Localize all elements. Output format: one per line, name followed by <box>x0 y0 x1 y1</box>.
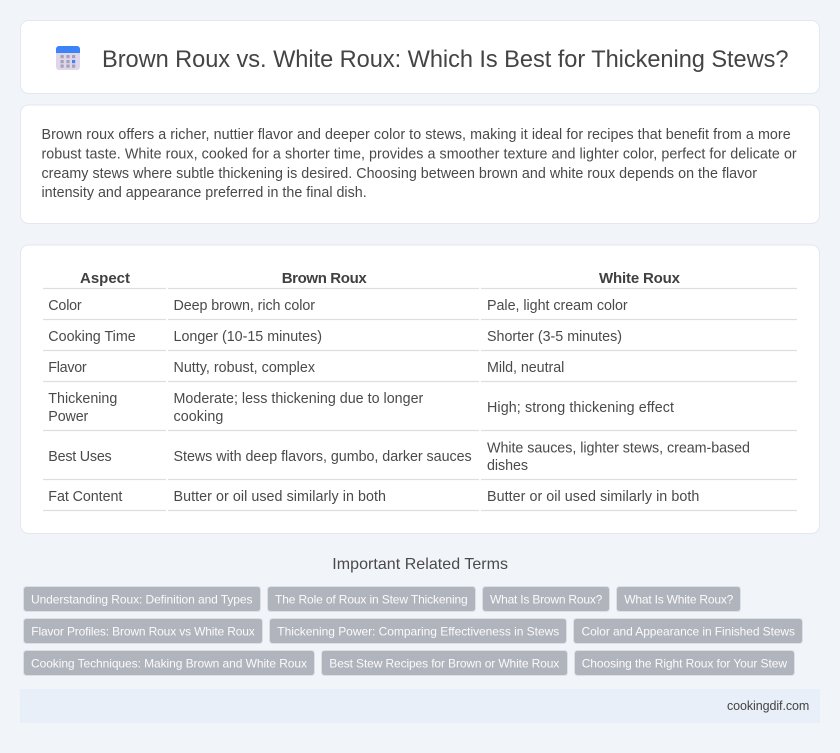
related term tags <box>24 586 802 676</box>
table row: cooking time: Shorter (3-5 minutes) <box>487 329 622 345</box>
text block: summary <box>42 127 797 201</box>
table row: best uses: Best Uses <box>48 449 112 465</box>
table row: color: Deep brown, rich color <box>174 298 315 314</box>
footer source: cookingdif.com <box>727 699 809 713</box>
text block: summary: intensity and appearance preferred in the final dish. <box>42 185 367 201</box>
tag row 1: What Is Brown Roux? <box>490 592 603 606</box>
table row: thickening power <box>43 391 797 430</box>
tag row 3: Cooking Techniques: Making Brown and White Roux <box>31 656 307 670</box>
tag row 3: Best Stew Recipes for Brown or White Roux <box>329 656 559 670</box>
footer bar <box>20 689 820 723</box>
table row: best uses <box>43 440 797 480</box>
table row: fat content: Butter or oil used similarly in both <box>174 489 386 505</box>
table row: fat content: Fat Content <box>48 489 122 505</box>
text block: summary: creamy stews where subtle thickening is desired. Choosing between brown and white roux depends on the flavor <box>42 166 757 182</box>
tag row 2: Thickening Power: Comparing Effectiveness in Stews <box>277 624 559 638</box>
table row: flavor: Nutty, robust, complex <box>174 360 315 376</box>
table row: fat content: Butter or oil used similarly in both <box>487 489 699 505</box>
icon: calendar <box>56 46 80 70</box>
tag row 2: Flavor Profiles: Brown Roux vs White Roux <box>31 624 255 638</box>
panel: comparison table <box>20 245 820 534</box>
tag row 1: Understanding Roux: Definition and Types <box>31 592 252 606</box>
tag row 1: The Role of Roux in Stew Thickening <box>275 592 468 606</box>
panel: summary paragraph <box>20 105 820 224</box>
table row: color: Color <box>48 298 82 314</box>
table row: flavor: Mild, neutral <box>487 360 564 376</box>
table header row <box>43 270 797 288</box>
text block: summary: robust taste. White roux, cooked for a shorter time, provides a smoother texture and lighter color, perfect for delicate or <box>42 146 797 162</box>
tag row 2 <box>24 618 802 644</box>
table row: thickening power: High; strong thickening effect <box>487 400 674 416</box>
table row: flavor <box>43 360 797 382</box>
panel: title card <box>20 20 820 94</box>
table row: best uses: dishes <box>487 458 528 474</box>
table header row: White Roux <box>599 270 681 287</box>
table row: thickening power: Thickening <box>48 391 117 407</box>
tag row 1: What Is White Roux? <box>624 592 734 606</box>
table row: color: Pale, light cream color <box>487 298 628 314</box>
title: Brown Roux vs. White Roux: Which Is Best for Thickening Stews? <box>102 47 788 73</box>
table row: fat content <box>43 489 797 510</box>
table row: cooking time: Cooking Time <box>48 329 136 345</box>
table header row: Aspect <box>80 270 130 287</box>
table row: cooking time: Longer (10-15 minutes) <box>174 329 322 345</box>
tag row 1 <box>24 586 740 612</box>
table row: cooking time <box>43 329 797 350</box>
table header row: Brown Roux <box>282 270 367 287</box>
table row: flavor: Flavor <box>48 360 87 376</box>
table row: best uses: Stews with deep flavors, gumbo, darker sauces <box>174 449 472 465</box>
text block: summary: Brown roux offers a richer, nuttier flavor and deeper color to stews, making it ideal for recipes that benefit from a more <box>42 127 791 143</box>
tag row 3 <box>24 650 794 676</box>
table row: thickening power: Power <box>48 409 89 425</box>
table row: thickening power: cooking <box>174 409 223 425</box>
tag row 3: Choosing the Right Roux for Your Stew <box>582 656 787 670</box>
tag row 2: Color and Appearance in Finished Stews <box>582 624 795 638</box>
table row: thickening power: Moderate; less thickening due to longer <box>174 391 424 407</box>
table row: color <box>43 298 797 320</box>
table row: best uses: White sauces, lighter stews, cream-based <box>487 440 750 456</box>
heading: related terms: Important Related Terms <box>332 556 508 573</box>
